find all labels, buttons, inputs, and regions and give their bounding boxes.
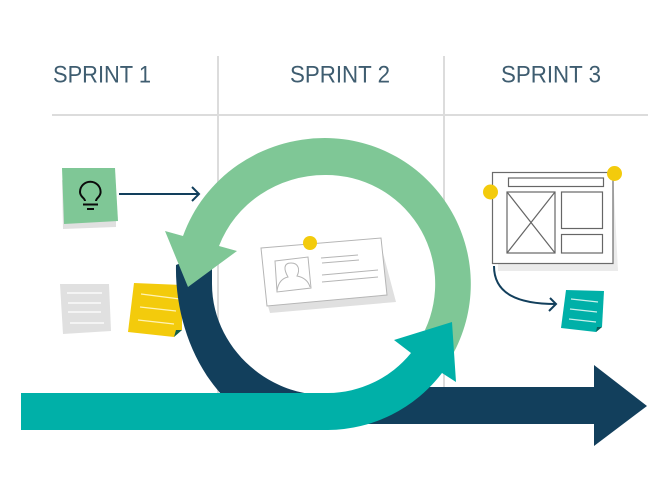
sticky note: yellow <box>128 283 182 337</box>
heading: sprint 2: SPRINT 2 <box>290 62 390 88</box>
profile card <box>261 236 396 313</box>
sticky note: grey <box>60 284 111 334</box>
heading: sprint 1: SPRINT 1 <box>53 62 151 88</box>
arrow: idea to sprint <box>119 187 199 201</box>
icon: light bulb <box>80 182 101 209</box>
green iteration loop arrow <box>165 138 471 352</box>
dark blue forward arrow with loop tail <box>176 250 647 446</box>
sticky note: teal <box>561 290 604 332</box>
pin <box>303 236 317 250</box>
portrait <box>275 257 311 292</box>
sprint grid lines <box>52 56 648 395</box>
card text lines <box>321 255 378 282</box>
wireframe panel <box>483 166 622 271</box>
heading: sprint 3: SPRINT 3 <box>501 62 601 88</box>
arrow: wireframe to note <box>494 266 556 311</box>
sticky note: green idea <box>62 168 118 229</box>
teal sprint entry arrow <box>21 322 456 430</box>
